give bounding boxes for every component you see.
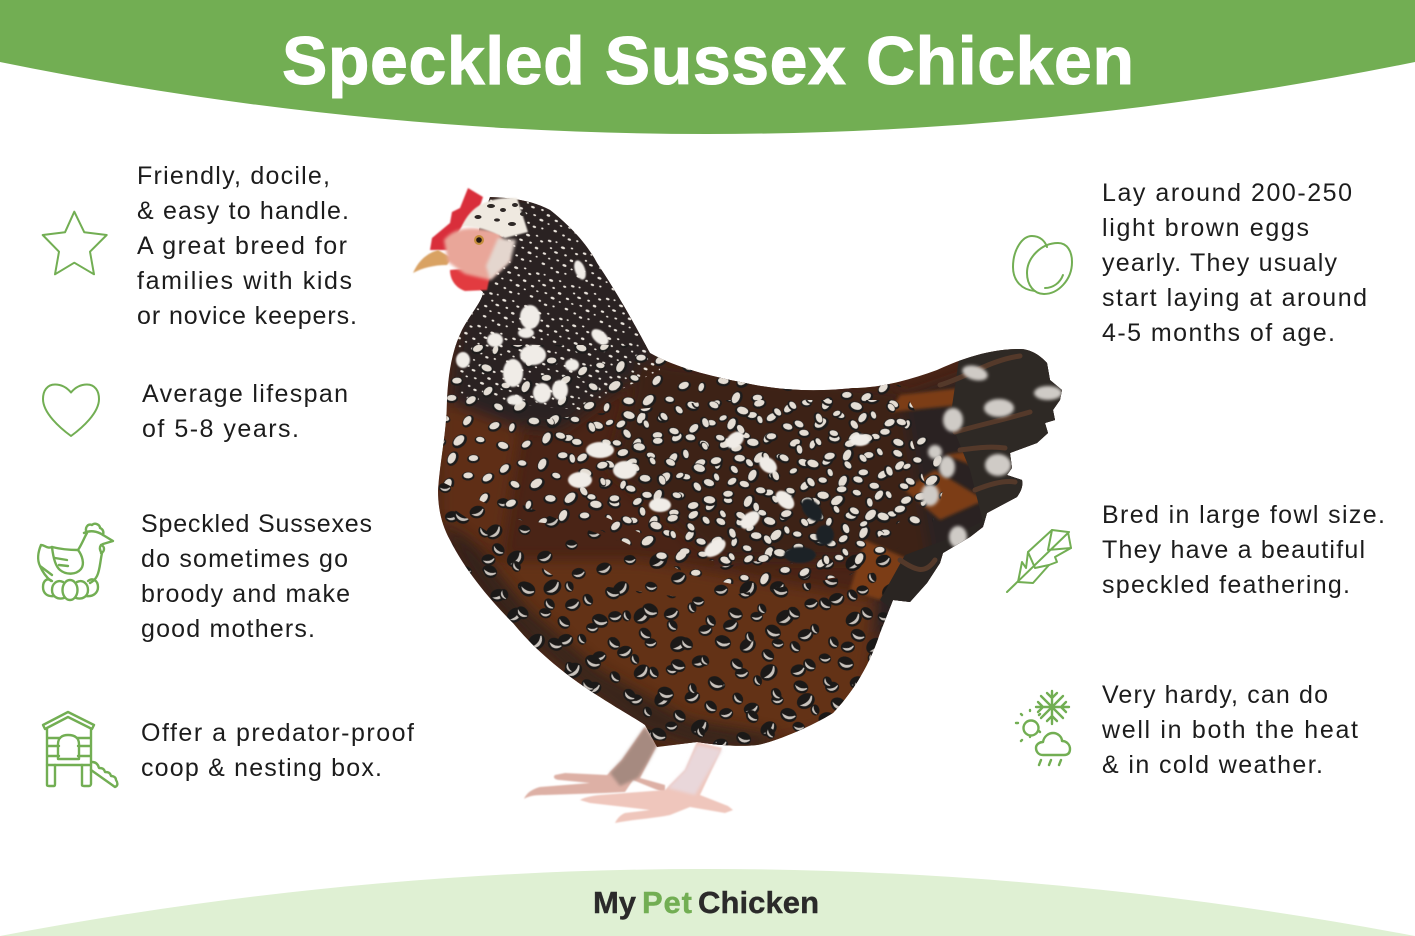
footer banner — [0, 869, 1415, 936]
logo: Chicken — [698, 885, 819, 920]
text: hardiness: & in cold weather. — [1102, 751, 1323, 779]
header banner — [0, 0, 1415, 134]
logo: My — [593, 885, 637, 920]
rust feather streaks — [850, 385, 985, 600]
comb — [430, 188, 483, 250]
eye — [474, 235, 484, 245]
text: coop: coop & nesting box. — [141, 754, 382, 782]
icon: heart — [43, 384, 99, 436]
dark accents on wing — [784, 495, 834, 563]
dense saddle speckles — [540, 400, 930, 565]
grey-white tail spots — [921, 363, 1062, 548]
lower body speckles — [438, 482, 892, 746]
tail dark feathers — [950, 345, 1065, 530]
text: egg laying: yearly. They usualy — [1102, 249, 1338, 277]
text: lifespan: of 5-8 years. — [142, 415, 299, 443]
front leg — [580, 742, 733, 823]
large white feather marks — [456, 259, 870, 561]
text: temperament: & easy to handle. — [137, 197, 349, 225]
text: broodiness: broody and make — [141, 580, 350, 608]
tail brown streaks — [900, 356, 1030, 569]
front shank — [668, 745, 722, 795]
dark shadowed underside — [440, 520, 780, 750]
body base — [438, 197, 1062, 747]
text: temperament: Friendly, docile, — [137, 162, 330, 190]
plumage — [435, 195, 1070, 760]
text: size and feathering: They have a beautiful — [1102, 536, 1365, 564]
chest and saddle speckles — [438, 345, 950, 590]
crown — [462, 198, 528, 238]
rear leg — [524, 727, 665, 799]
chicken illustration — [413, 188, 1070, 823]
rear shank — [610, 727, 657, 786]
text: broodiness: Speckled Sussexes — [141, 510, 372, 538]
text: lifespan: Average lifespan — [142, 380, 348, 408]
face — [444, 228, 510, 280]
icon: weather — [1016, 691, 1070, 765]
text: size and feathering: speckled feathering. — [1102, 571, 1350, 599]
lower body speckles, second layer — [440, 500, 890, 745]
title: Speckled Sussex Chicken — [282, 23, 1134, 99]
text: egg laying: 4-5 months of age. — [1102, 319, 1335, 347]
head — [413, 188, 528, 291]
beak — [413, 250, 452, 273]
text: broodiness: do sometimes go — [141, 545, 348, 573]
wattle — [450, 268, 490, 291]
text: hardiness: well in both the heat — [1101, 716, 1358, 744]
icon: feather — [1007, 530, 1071, 592]
icon: two eggs — [1013, 236, 1072, 294]
icon: broody hen on eggs — [38, 524, 113, 600]
text: coop: Offer a predator-proof — [141, 719, 414, 747]
neck speckles — [455, 195, 660, 410]
text: hardiness: Very hardy, can do — [1102, 681, 1328, 709]
text: size and feathering: Bred in large fowl size. — [1102, 501, 1385, 529]
text: temperament: or novice keepers. — [137, 302, 357, 330]
text: egg laying: light brown eggs — [1102, 214, 1309, 242]
text: temperament: families with kids — [137, 267, 352, 295]
logo: Pet — [642, 885, 692, 920]
text: egg laying: Lay around 200-250 — [1102, 179, 1352, 207]
text: temperament: A great breed for — [137, 232, 347, 260]
text: egg laying: start laying at around — [1102, 284, 1367, 312]
crown specks — [474, 203, 526, 226]
icon: chicken coop — [43, 712, 117, 787]
text: broodiness: good mothers. — [141, 615, 315, 643]
icon: star — [43, 212, 107, 274]
cheek feathers — [486, 238, 516, 280]
